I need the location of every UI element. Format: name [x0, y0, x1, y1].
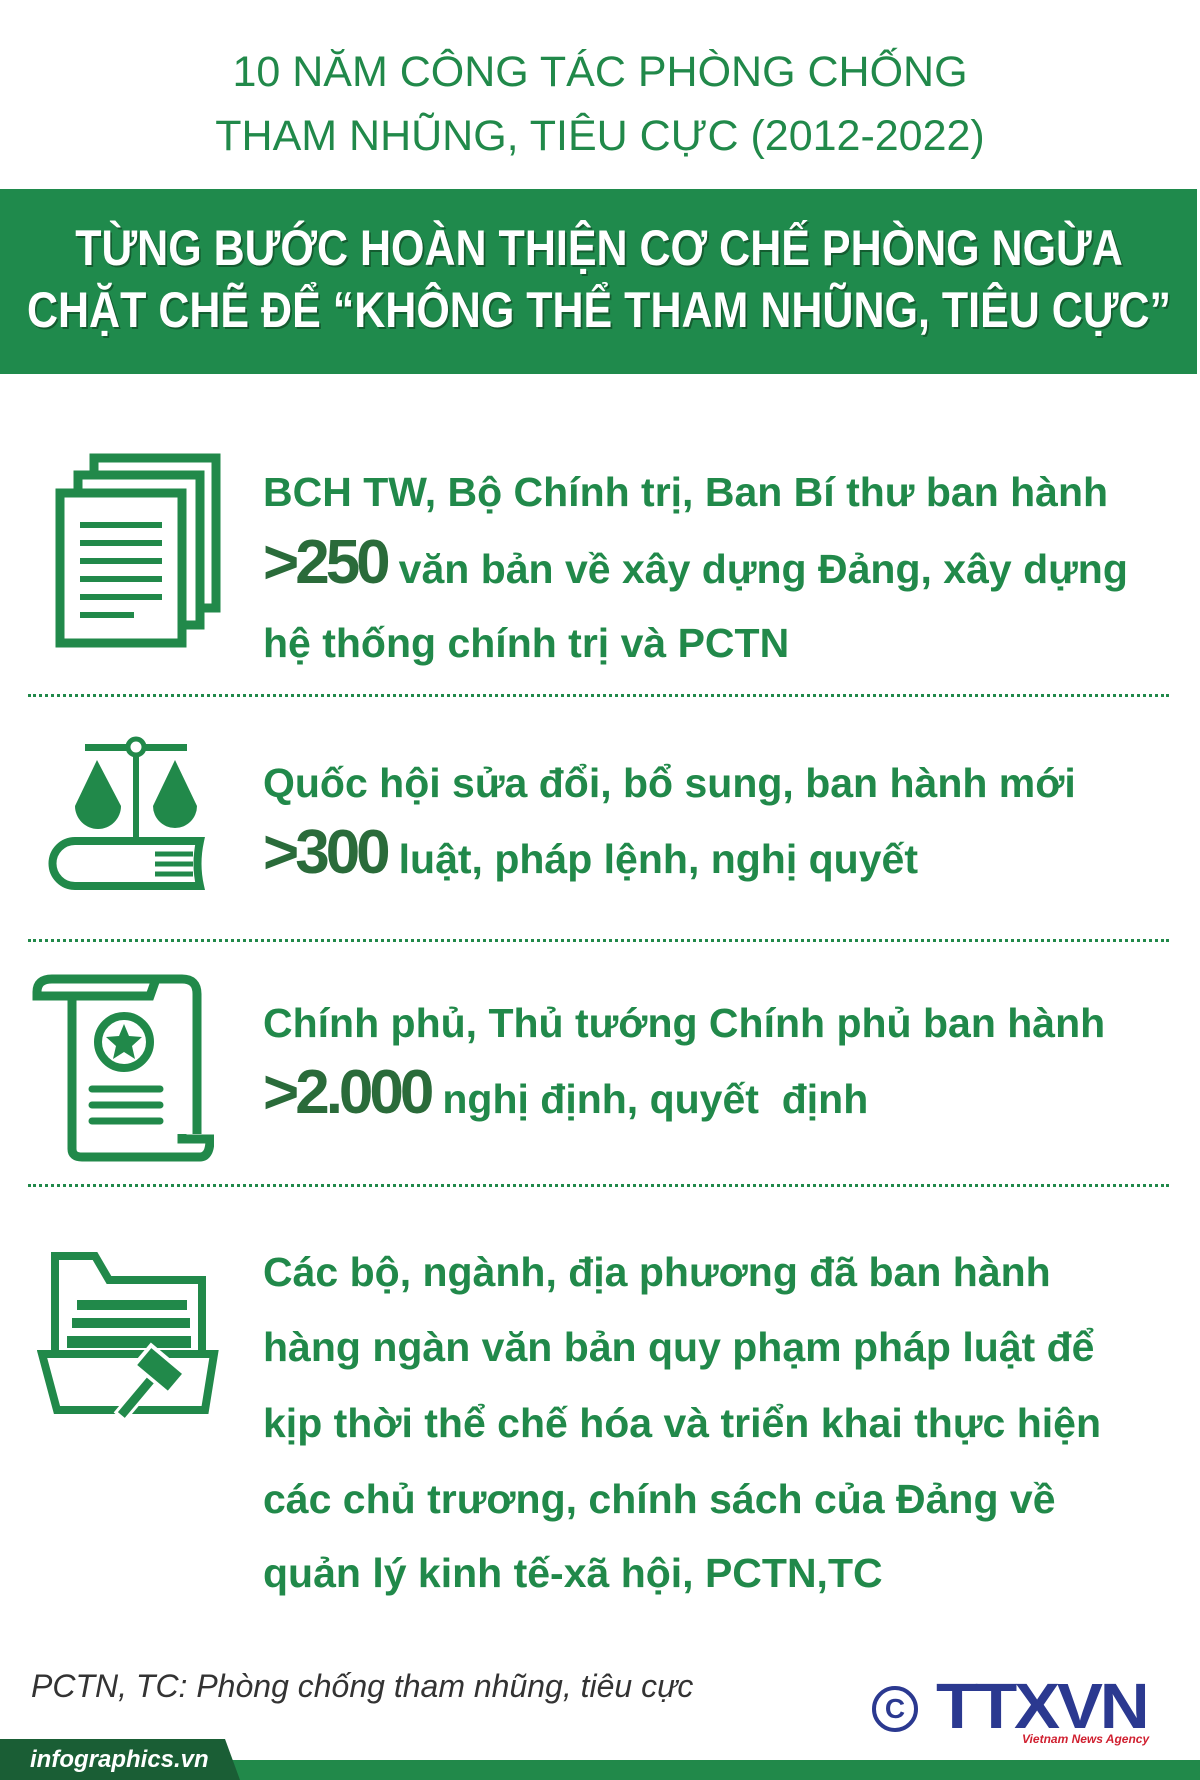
logo: TTXVN: TTXVN [936, 1670, 1146, 1742]
footer tab: infographics.vn [0, 1739, 240, 1780]
title [215, 48, 985, 160]
text: item 3 [263, 1000, 1105, 1127]
headline banner [0, 189, 1197, 374]
text: item 1 [263, 469, 1128, 666]
text: item 4: kịp thời thể chế hóa và triển khai thực hiện [263, 1400, 1101, 1446]
bottom bar [0, 1760, 1200, 1780]
text: item 2: >300 luật, pháp lệnh, nghị quyết [263, 818, 918, 887]
text: item 1: >250 văn bản về xây dựng Đảng, xây dựng [263, 528, 1128, 597]
text: item 4: quản lý kinh tế-xã hội, PCTN,TC [263, 1550, 883, 1596]
text: item 4: hàng ngàn văn bản quy phạm pháp luật để [263, 1324, 1094, 1370]
icon: scales on book [48, 736, 205, 890]
text: item 4: các chủ trương, chính sách của Đảng về [263, 1476, 1056, 1522]
text: item 3: >2.000 nghị định, quyết định [263, 1058, 868, 1127]
title: THAM NHŨNG, TIÊU CỰC (2012-2022) [215, 112, 985, 160]
text: item 2: Quốc hội sửa đổi, bổ sung, ban hành mới [263, 760, 1076, 806]
text: item 4: Các bộ, ngành, địa phương đã ban hành [263, 1249, 1051, 1295]
headline text: CHẶT CHẼ ĐỂ “KHÔNG THỂ THAM NHŨNG, TIÊU CỰC” [26, 282, 1171, 338]
footnote: PCTN, TC: Phòng chống tham nhũng, tiêu cực [31, 1668, 693, 1704]
logo: TTXVN: C [885, 1693, 905, 1724]
headline text [26, 220, 1171, 338]
footer tab: infographics.vn: infographics.vn [30, 1746, 209, 1773]
logo: TTXVN: Vietnam News Agency [1022, 1732, 1149, 1746]
text: item 1: BCH TW, Bộ Chính trị, Ban Bí thư ban hành [263, 469, 1108, 515]
text: item 1: hệ thống chính trị và PCTN [263, 620, 789, 666]
text: item 2 [263, 760, 1076, 887]
text: item 4 [263, 1249, 1101, 1596]
icon: folder with gavel [37, 1252, 219, 1418]
title: 10 NĂM CÔNG TÁC PHÒNG CHỐNG [232, 48, 968, 96]
text: item 3: Chính phủ, Thủ tướng Chính phủ ban hành [263, 1000, 1105, 1046]
icon: decree scroll [32, 974, 214, 1162]
headline text: TỪNG BƯỚC HOÀN THIỆN CƠ CHẾ PHÒNG NGỪA [75, 220, 1122, 276]
icon: documents [56, 454, 220, 648]
